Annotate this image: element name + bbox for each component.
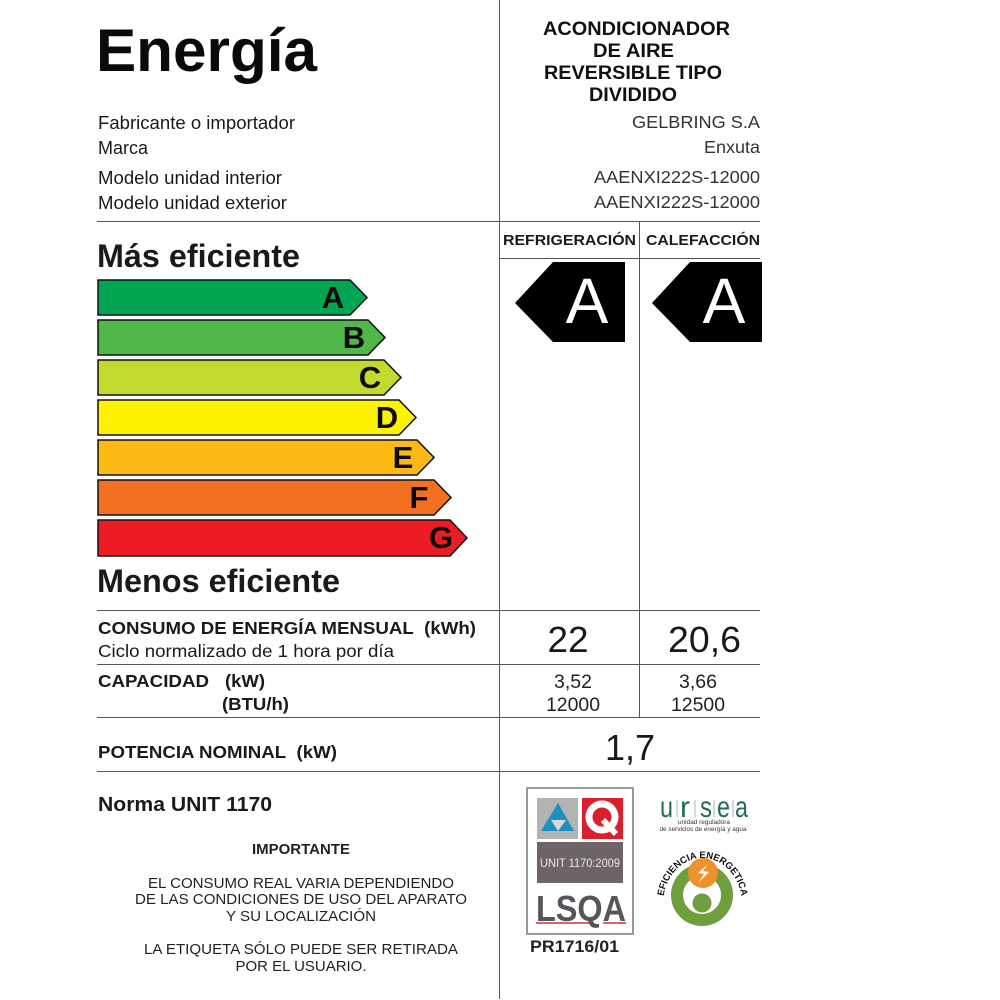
bar D: D — [376, 400, 398, 435]
capacity row: 12000 — [546, 695, 600, 716]
manufacturer values: AAENXI222S-12000 — [594, 192, 760, 212]
URSEA logo: s — [700, 791, 712, 824]
important notice: Y SU LOCALIZACIÓN — [226, 908, 376, 925]
important notice: DE LAS CONDICIONES DE USO DEL APARATO — [135, 891, 467, 908]
heading: menos eficiente: Menos eficiente — [97, 563, 340, 599]
efficiency scale — [98, 280, 467, 556]
important notice: EL CONSUMO REAL VARIA DEPENDIENDO — [148, 875, 454, 892]
certificate number: PR1716/01 — [530, 937, 619, 956]
energy consumption row: 20,6 — [668, 619, 741, 660]
bar A: A — [322, 280, 344, 315]
capacity row: 12500 — [671, 695, 725, 716]
bar B — [98, 320, 385, 355]
energy efficiency logo: EFICIENCIA ENERGETICA — [657, 852, 748, 896]
product type heading — [543, 18, 730, 106]
manufacturer values: AAENXI222S-12000 — [594, 167, 760, 187]
URSEA logo: u — [660, 791, 673, 824]
bar B: B — [343, 320, 365, 355]
capacity row: 3,52 — [554, 672, 592, 693]
product type heading: DE AIRE — [593, 40, 674, 62]
title: Energía — [96, 17, 318, 84]
manufacturer values: Enxuta — [704, 137, 760, 157]
bar D — [98, 400, 416, 435]
manufacturer labels: Modelo unidad exterior — [98, 193, 287, 213]
URSEA logo: unidad reguladora — [678, 820, 731, 826]
bar G — [98, 520, 467, 556]
important notice: LA ETIQUETA SÓLO PUEDE SER RETIRADA — [144, 941, 458, 958]
nominal power row: 1,7 — [605, 727, 655, 768]
LSQA certification logo: LSQA — [536, 888, 626, 929]
bar F — [98, 480, 451, 515]
bar G: G — [429, 520, 453, 555]
important notice: IMPORTANTE — [252, 841, 350, 858]
column heading: refrigeración: REFRIGERACIÓN — [503, 231, 636, 249]
bar A — [98, 280, 367, 315]
bar F: F — [410, 480, 428, 515]
rating arrow: refrigeración: A — [566, 265, 609, 337]
energy consumption row: CONSUMO DE ENERGÍA MENSUAL (kWh) — [98, 617, 476, 638]
URSEA logo: a — [735, 791, 748, 824]
URSEA logo: r — [680, 791, 690, 824]
URSEA logo — [660, 791, 748, 833]
energy consumption row: 22 — [548, 619, 588, 660]
manufacturer labels: Fabricante o importador — [98, 113, 295, 133]
important notice: POR EL USUARIO. — [236, 958, 366, 975]
standard name: Norma UNIT 1170 — [98, 793, 272, 816]
LSQA certification logo — [527, 788, 633, 934]
capacity row: CAPACIDAD — [98, 671, 209, 691]
URSEA logo: de servicios de energía y agua — [660, 827, 747, 833]
manufacturer values: GELBRING S.A — [632, 112, 760, 132]
heading: más eficiente: Más eficiente — [97, 238, 300, 274]
manufacturer labels: Marca — [98, 138, 149, 158]
important notice — [135, 841, 467, 975]
rating arrow: calefacción — [652, 262, 762, 342]
manufacturer values — [594, 112, 760, 212]
rating arrow: calefacción: A — [703, 265, 746, 337]
capacity row: 3,66 — [679, 672, 717, 693]
product type heading: REVERSIBLE TIPO — [544, 62, 722, 84]
column heading: calefacción: CALEFACCIÓN — [646, 231, 760, 249]
URSEA logo: e — [717, 791, 730, 824]
bar C — [98, 360, 401, 395]
energy consumption row: Ciclo normalizado de 1 hora por día — [98, 641, 394, 661]
bar E — [98, 440, 434, 475]
nominal power row: POTENCIA NOMINAL (kW) — [98, 742, 337, 762]
product type heading: DIVIDIDO — [589, 84, 677, 106]
nominal power row — [98, 727, 655, 768]
capacity row: (kW) — [225, 671, 265, 691]
energy consumption row — [98, 617, 741, 661]
manufacturer labels: Modelo unidad interior — [98, 168, 282, 188]
rating arrow: refrigeración — [515, 262, 625, 342]
LSQA certification logo: UNIT 1170:2009 — [540, 856, 620, 870]
bar E: E — [393, 440, 413, 475]
energy efficiency logo — [657, 852, 748, 926]
product type heading: ACONDICIONADOR — [543, 18, 730, 40]
bar C: C — [359, 360, 381, 395]
capacity row — [98, 671, 725, 716]
capacity row: (BTU/h) — [222, 694, 289, 714]
manufacturer labels — [98, 113, 295, 213]
